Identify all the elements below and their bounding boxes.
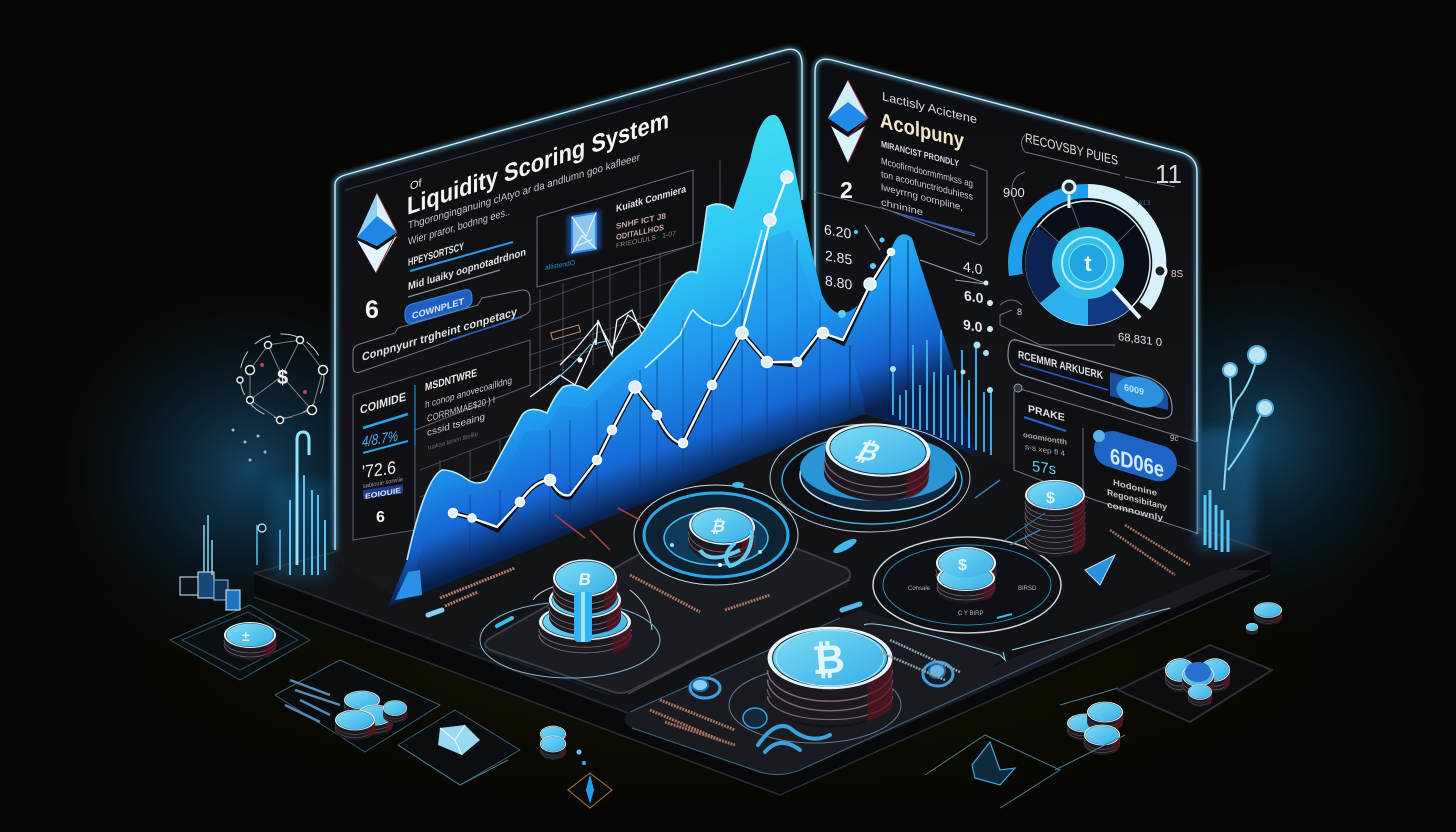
panel: prake: 9c: [1170, 434, 1178, 443]
neon bars left: [257, 432, 330, 580]
panel: market container: SNHF ICT J8: [616, 211, 667, 231]
gauge: 900: [1003, 185, 1025, 200]
floor platform: [254, 413, 1270, 795]
icon: network with dollar: [232, 334, 328, 462]
panel: lower left stats: COIMIDE: [360, 390, 406, 417]
text block: right wall heading: [815, 89, 987, 245]
panel: lower left stats: sabiouie sorwiie: [363, 477, 404, 490]
chart: axis labels: 6.0: [964, 287, 984, 306]
number 2: 2: [840, 177, 853, 203]
gauge: 8: [1017, 307, 1022, 317]
panel: prake: [1014, 384, 1197, 533]
panel: prake: s-s xep fl 4: [1025, 442, 1065, 458]
heading: recovery: 11: [1155, 159, 1182, 189]
coin stack: red bottom right: [1055, 602, 1282, 770]
panel: lower left stats: '72.6: [362, 457, 396, 482]
coin: circular gauge: Consale: [908, 586, 931, 592]
panel: prake: ooomiontth: [1023, 430, 1067, 447]
coin: swirl ring: ₿: [709, 516, 728, 536]
text block: left wall intro: [408, 151, 640, 297]
coin: top disc: ₿: [850, 437, 886, 467]
chart: axis labels: 8.80: [825, 272, 852, 293]
chart: axis labels: 9.0: [963, 316, 983, 335]
side tile: coins right: [1118, 645, 1272, 722]
coin: large bitcoin: [729, 627, 901, 743]
text block: lower left details: CORRMMAE$20 ) I: [427, 395, 495, 425]
text block: lower left details: tuaksa tanen tbolite: [428, 431, 478, 452]
coin: stacked right: $: [1046, 490, 1055, 507]
text block: lower left details: MSDNTWRE: [425, 367, 477, 394]
gauge: t: [1084, 251, 1092, 276]
icon: ethereum diamond right: [828, 80, 868, 163]
tile: coin panel centre-left: [470, 518, 850, 695]
coin: stack with glow column: [480, 559, 660, 678]
text block: left wall intro: Thgoronginganuing clAtyo ar da andlumn goo kafleeer: [408, 151, 640, 232]
chart: axis labels: 2.85: [825, 247, 852, 268]
gauge: 68,831 0: [1118, 331, 1162, 349]
panel: prake: PRAKE: [1028, 403, 1065, 424]
chart: axis labels: 6.20: [824, 221, 851, 242]
slider: recommend: 6009: [1124, 382, 1144, 397]
gauge: [1000, 172, 1184, 349]
panel: right wall: [815, 59, 1197, 534]
panel: prake: 57s: [1032, 458, 1056, 478]
panel: market container: [537, 170, 693, 287]
coin: circular gauge: C Y BIRP: [958, 611, 983, 617]
callout: compliance: Conpnyurr trgheint conpetacy: [362, 305, 517, 364]
icon: ethereum diamond left: [357, 193, 397, 273]
pill: big value: 6D06e: [1110, 443, 1164, 482]
text block: lower left details: cssid tseaing: [427, 412, 485, 439]
gauge: A13: [1138, 200, 1151, 207]
icon: gem outline: [925, 735, 1060, 808]
neon bars and tree right: [1195, 346, 1273, 552]
text block: right wall heading: MIRANCIST PRONDLY: [881, 139, 959, 168]
text block: lower left details: h conop anovecoailldng: [425, 375, 512, 411]
icons: panel chips: [690, 482, 953, 752]
text block: right wall heading: Lactisly Acictene: [882, 89, 977, 127]
left wall grid: [415, 160, 800, 515]
button: complete: [405, 290, 472, 323]
pill: big value: Regonsibitany: [1107, 487, 1167, 512]
chart: bars: [890, 330, 993, 455]
icon: city blocks: [180, 515, 240, 610]
text block: right wall heading: ton acoofunctrioduhiess: [881, 169, 973, 203]
small floor labels: [428, 480, 1190, 745]
text block: left wall intro: Mid luaiky oopnotadrdnon: [408, 246, 526, 293]
panel: lower left stats: 6: [376, 509, 385, 526]
side tile: small coin left: ±: [242, 628, 250, 644]
title: Of: [410, 177, 422, 193]
text block: right wall heading: Mcoofirmdoormmmkss ag: [881, 156, 973, 190]
pill: big value: Hodonine: [1113, 477, 1157, 498]
panel: market container: FRIEOUULS · 1-07: [616, 230, 676, 250]
text block: lower left details: [425, 367, 512, 452]
button: complete: COWNPLET: [412, 296, 464, 321]
coin: circular gauge: [873, 537, 1061, 633]
side tile: gem: [398, 710, 520, 785]
coin: circular gauge: BIRSD: [1018, 586, 1037, 592]
panel: lower left stats: EOIOUIE: [365, 486, 401, 501]
mini line chart: [530, 310, 650, 397]
pill: big value: comnownly: [1107, 499, 1163, 523]
coin: large bitcoin: ₿: [811, 637, 846, 683]
pill: big value: [1090, 427, 1181, 523]
text block: right wall heading: chninine: [881, 197, 923, 218]
slider: recommend: [1008, 340, 1172, 418]
panel: market container: allistendO: [545, 260, 575, 272]
side tile: coin pile left: [275, 660, 440, 752]
heading: recovery: [1022, 130, 1182, 189]
panel: market container: ODITALLHOS: [616, 223, 665, 242]
text block: left wall intro: Wier praror, bodnng ees..: [408, 206, 510, 248]
number 6: 6: [365, 296, 379, 324]
panel: left wall: [335, 49, 802, 602]
coin: swirl ring: [634, 485, 798, 585]
coin: top disc: [770, 420, 970, 532]
chart: axis labels: 4.0: [963, 258, 983, 277]
coin: stacked right: [1025, 480, 1085, 557]
slider: recommend: RCEMMR ARKUERK: [1018, 349, 1103, 382]
panel: lower left stats: 4/8.7%: [362, 428, 398, 451]
chart: data line with nodes: [448, 171, 894, 530]
callout: compliance: [353, 290, 530, 372]
text block: right wall heading: lweyrrng oompline,: [881, 182, 963, 213]
panel: market container: Kuiatk Conmiera: [616, 184, 686, 215]
title: Liquidity Scoring System: [407, 106, 669, 221]
icon: diamond marker: [568, 773, 612, 808]
small coin and pin: [540, 726, 586, 765]
text block: right wall heading: Acolpuny: [880, 108, 964, 153]
panel: lower left stats: [353, 340, 530, 540]
coin: circular gauge: $: [958, 557, 967, 574]
heading: recovery: RECOVSBY PUIES: [1025, 130, 1118, 168]
side tile: small coin left: [170, 605, 310, 680]
chart: area back layer: [388, 115, 975, 607]
coin: stack with glow column: B: [577, 570, 592, 589]
text block: left wall intro: HPEYSORTSCY: [408, 241, 464, 269]
tile: coin panel bottom: [624, 570, 1262, 775]
gauge: 8S: [1171, 269, 1184, 280]
icon: network with dollar: $: [277, 367, 288, 389]
chart: axis labels: [824, 221, 993, 335]
